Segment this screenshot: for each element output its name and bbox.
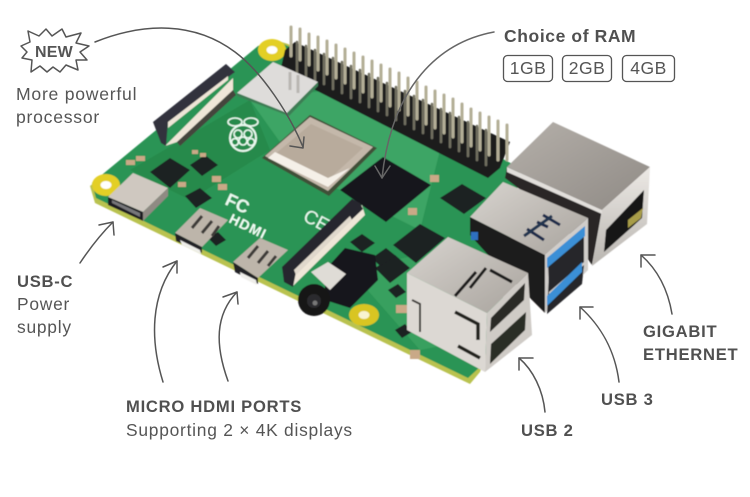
GPIO header — [280, 27, 510, 178]
label: USB-C power supply: USB-C — [17, 272, 73, 291]
USB 2 port — [407, 237, 532, 372]
label: micro HDMI ports: Supporting 2 × 4K displays — [126, 420, 353, 440]
board markings: CE — [300, 206, 333, 237]
arrow: RAM — [375, 32, 494, 178]
RAM options — [504, 56, 674, 82]
badge: NEW starburst — [21, 29, 89, 72]
arrow: micro HDMI 1 — [155, 261, 177, 382]
arrow: gigabit ethernet — [641, 255, 672, 314]
camera connector — [282, 199, 365, 287]
lighter green patches — [250, 90, 440, 230]
arrow: USB 2 — [519, 358, 545, 412]
processor chip — [262, 115, 377, 196]
board markings: HDMI — [227, 210, 269, 242]
USB 3 blue tongues — [547, 226, 585, 306]
wireless shield — [237, 62, 318, 116]
board markings — [222, 189, 333, 242]
badge: NEW starburst: NEW — [35, 44, 74, 61]
label: USB-C power supply: supply — [17, 317, 72, 337]
heading: choice of RAM: Choice of RAM — [504, 26, 636, 46]
arrow: USB 3 — [580, 307, 619, 382]
arrow: micro HDMI 2 — [219, 292, 238, 381]
text: more powerful processor: processor — [16, 107, 100, 127]
USB 3 port — [470, 182, 588, 314]
board: Raspberry Pi circuit board — [90, 27, 650, 384]
label: USB-C power supply: Power — [17, 294, 70, 314]
micro HDMI port 1 — [175, 208, 228, 254]
arrow: USB-C — [80, 222, 114, 263]
display connector — [153, 64, 236, 146]
audio jack — [298, 248, 378, 316]
Ethernet port — [505, 122, 650, 266]
label: gigabit ethernet: ETHERNET — [643, 345, 738, 364]
label: gigabit ethernet: GIGABIT — [643, 322, 717, 341]
mounting holes — [92, 39, 379, 326]
label: micro HDMI ports: MICRO HDMI PORTS — [126, 397, 302, 416]
other chips — [150, 155, 486, 338]
label: USB 3: USB 3 — [601, 390, 654, 409]
board surface — [92, 40, 520, 378]
RAM options: 4GB — [630, 58, 667, 78]
board markings: FC — [222, 189, 253, 218]
RAM options: 2GB — [569, 58, 605, 78]
RAM options: 1GB — [510, 58, 546, 78]
Raspberry Pi logo — [228, 118, 258, 151]
board edge — [90, 39, 520, 384]
label: USB 2: USB 2 — [521, 421, 574, 440]
USB-C connector — [108, 173, 168, 221]
arrow: new processor — [95, 28, 304, 148]
text: more powerful processor: More powerful — [16, 84, 137, 104]
micro HDMI port 2 — [233, 238, 288, 285]
RAM chip — [340, 157, 431, 222]
small components — [126, 150, 439, 359]
